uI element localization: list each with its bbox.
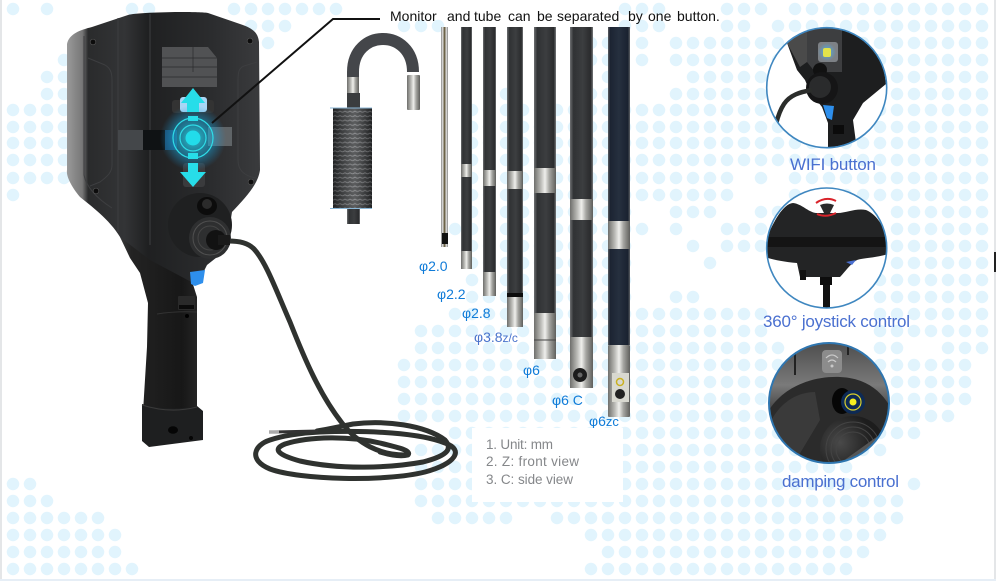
tube φ2.8 [483,27,496,296]
bent tube sample with spring [330,39,420,224]
screws [90,38,254,194]
monitor rear panel details [84,14,257,245]
handle grip [120,230,197,412]
tube φ2.0 [441,27,448,247]
callout text: one [648,8,672,24]
grip latch [157,296,197,318]
circle: WIFI button [767,28,887,150]
connector dome and knob [168,193,232,259]
monitor body [67,12,260,285]
size labels: φ6zc [589,413,619,429]
callout text: Monitor [390,8,437,24]
callout text: can [508,8,531,24]
lower and upper button wells [172,97,214,187]
size labels: φ2.0 [419,258,448,274]
callout text: by [628,8,643,24]
tube φ6zc [608,27,630,417]
speaker panel [162,47,217,87]
label: WIFI button: WIFI button [790,155,876,174]
label: 360° joystick control: 360° joystick control [763,312,910,331]
cable coil [228,241,455,478]
strap band [118,127,232,150]
device: monitor with handle and cable [67,12,455,478]
size labels [419,258,619,429]
grip base [142,404,203,447]
tube φ6 C [570,27,593,388]
tube φ2.2 [461,27,472,269]
glow rings and arrows [160,88,226,187]
circle: 360° joystick control [766,188,888,310]
size labels: φ6 [523,362,540,378]
callout text: tube [474,8,501,24]
circle: damping control [768,342,890,464]
callout text: button. [677,8,720,24]
callout text: be [537,8,553,24]
notes box: 3. C: side view [486,472,573,487]
size labels: φ6 C [552,392,583,408]
notes box: 1. Unit: mm [486,437,553,452]
size labels: φ2.8 [462,305,491,321]
notes box [472,428,623,502]
cable probe tip [269,431,318,432]
callout text: and [447,8,470,24]
leader line [212,19,380,123]
blue trigger [190,270,205,286]
tube φ3.8 [507,27,523,327]
callout text: separated [557,8,619,24]
size labels: φ2.2 [437,286,466,302]
tube φ6 [534,27,556,359]
notes box: 2. Z: front view [486,454,579,469]
label: damping control: damping control [782,472,899,491]
size labels: φ3.8z/c [474,329,518,345]
